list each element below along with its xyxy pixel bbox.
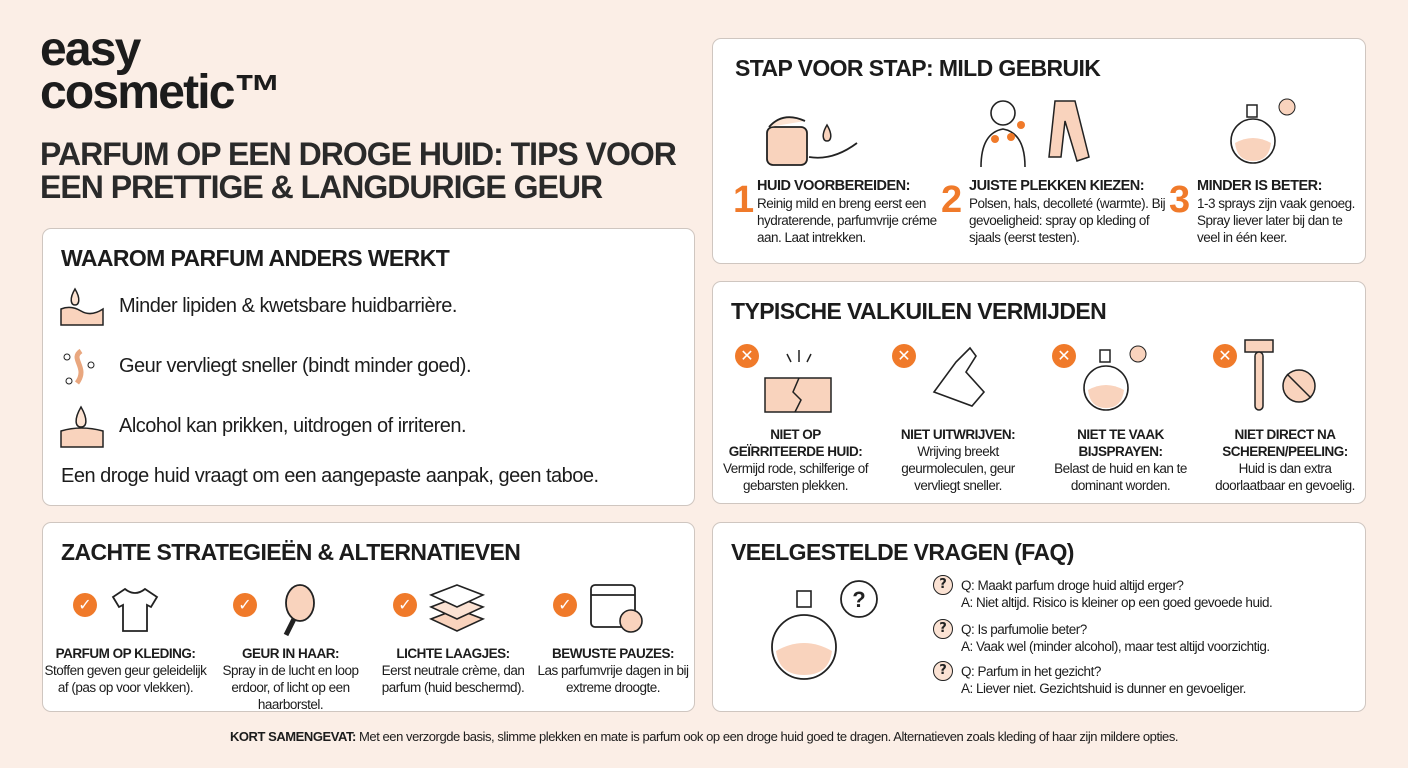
- panel: faq: [712, 522, 1366, 712]
- step 2: [941, 178, 1165, 245]
- step 3: [1169, 178, 1355, 245]
- item: kleding: PARFUM OP KLEDING:: [56, 646, 195, 661]
- step 3: 1-3 sprays zijn vaak genoeg. Spray liever later bij dan te veel in één keer.: [1197, 196, 1355, 245]
- item: uitwrijven: Wrijving breekt geurmoleculen, geur vervliegt sneller.: [901, 444, 1015, 493]
- logo: easy: [40, 23, 140, 76]
- item: bijsprayen: ✕: [1057, 346, 1071, 365]
- title: EEN PRETTIGE & LANGDURIGE GEUR: [40, 169, 602, 205]
- panel: valkuilen: [712, 281, 1366, 504]
- footer summary: KORT SAMENGEVAT: Met een verzorgde basis, slimme plekken en mate is parfum ook op een droge huid goed te dragen. Alternatieven zoals kleding of haar zijn mildere opties.: [230, 729, 1178, 744]
- item: pauzes: [537, 584, 689, 695]
- item: haar: Spray in de lucht en loop erdoor, of licht op een haarborstel.: [222, 663, 359, 712]
- panel: waarom: [42, 228, 695, 506]
- item: uitwrijven: NIET UITWRIJVEN:: [901, 427, 1015, 442]
- faq 3: Q: Parfum in het gezicht?: [961, 664, 1101, 679]
- item: pauzes: BEWUSTE PAUZES:: [552, 646, 674, 661]
- item: geirriteerde huid: ✕: [740, 346, 754, 365]
- icon: perfume question: [771, 580, 878, 680]
- faq 2: Q: Is parfumolie beter?: [961, 622, 1087, 637]
- item: bijsprayen: Belast de huid en kan te dominant worden.: [1054, 461, 1187, 493]
- item: scheren: NIET DIRECT NA: [1234, 427, 1336, 442]
- heading: valkuilen: TYPISCHE VALKUILEN VERMIJDEN: [731, 298, 1106, 324]
- step 1: [733, 178, 937, 245]
- faq 2: A: Vaak wel (minder alcohol), maar test altijd voorzichtig.: [961, 639, 1270, 654]
- heading: faq: VEELGESTELDE VRAGEN (FAQ): [731, 539, 1074, 565]
- title: PARFUM OP EEN DROGE HUID: TIPS VOOR: [40, 136, 676, 172]
- item: laagjes: [382, 584, 524, 695]
- item: bijsprayen: [1052, 344, 1187, 493]
- text: conclusion: Een droge huid vraagt om een aangepaste aanpak, geen taboe.: [61, 465, 599, 487]
- panel: zachte strategieen: [42, 522, 695, 712]
- item: scheren: SCHEREN/PEELING:: [1222, 444, 1348, 459]
- heading: strategieen: ZACHTE STRATEGIEËN & ALTERNATIEVEN: [61, 539, 520, 565]
- faq 1: ?: [939, 577, 947, 592]
- heading: waarom: WAAROM PARFUM ANDERS WERKT: [61, 245, 449, 271]
- item: geur: Geur vervliegt sneller (bindt minder goed).: [119, 355, 471, 377]
- item: bijsprayen: BIJSPRAYEN:: [1078, 444, 1163, 459]
- item: uitwrijven: ✕: [897, 346, 911, 365]
- heading: stap: STAP VOOR STAP: MILD GEBRUIK: [735, 55, 1100, 81]
- item: scheren: Huid is dan extra doorlaatbaar en gevoelig.: [1215, 461, 1355, 493]
- item: kleding: Stoffen geven geur geleidelijk af (pas op voor vlekken).: [45, 663, 206, 695]
- item: alcohol: [60, 406, 466, 448]
- faq 3: [933, 661, 1246, 696]
- faq 1: [933, 575, 1272, 610]
- step 1: Reinig mild en breng eerst een hydraterende, parfumvrije créme aan. Laat intrekken.: [757, 196, 937, 245]
- step 3: 3: [1169, 179, 1190, 221]
- faq 3: ?: [939, 663, 947, 678]
- icon: creme: [766, 116, 858, 166]
- step 2: Polsen, hals, decolleté (warmte). Bij gevoeligheid: spray op kleding of sjaals (eerst testen).: [969, 196, 1165, 245]
- item: uitwrijven: [892, 344, 1016, 493]
- step 2: JUISTE PLEKKEN KIEZEN:: [969, 178, 1144, 194]
- step 1: HUID VOORBEREIDEN:: [757, 178, 910, 194]
- item: geirriteerde huid: Vermijd rode, schilferige of gebarsten plekken.: [723, 461, 868, 493]
- item: geur: [64, 349, 471, 384]
- faq 2: ?: [939, 621, 947, 636]
- step 2: 2: [941, 179, 962, 221]
- faq 2: [933, 619, 1270, 654]
- icon: body & scarf: [980, 100, 1090, 167]
- logo: [40, 23, 280, 119]
- item: haar: [222, 584, 359, 712]
- item: lipiden: Minder lipiden & kwetsbare huidbarrière.: [119, 295, 457, 317]
- item: geirriteerde huid: NIET OP: [770, 427, 821, 442]
- item: laagjes: ✓: [398, 595, 412, 614]
- item: bijsprayen: NIET TE VAAK: [1077, 427, 1164, 442]
- item: geirriteerde huid: GEÏRRITEERDE HUID:: [729, 444, 862, 459]
- logo: cosmetic™: [40, 66, 280, 119]
- item: pauzes: ✓: [558, 595, 572, 614]
- item: kleding: [45, 588, 207, 695]
- step 3: MINDER IS BETER:: [1197, 178, 1322, 194]
- icon: perfume question: ?: [852, 587, 866, 612]
- item: geirriteerde huid: [723, 344, 869, 493]
- faq 1: Q: Maakt parfum droge huid altijd erger?: [961, 578, 1183, 593]
- item: haar: ✓: [238, 595, 252, 614]
- item: pauzes: Las parfumvrije dagen in bij extreme droogte.: [537, 663, 689, 695]
- item: scheren: ✕: [1218, 346, 1232, 365]
- item: lipiden: [60, 288, 457, 326]
- item: laagjes: LICHTE LAAGJES:: [396, 646, 510, 661]
- item: haar: GEUR IN HAAR:: [242, 646, 339, 661]
- item: kleding: ✓: [78, 595, 92, 614]
- item: alcohol: Alcohol kan prikken, uitdrogen of irriteren.: [119, 415, 466, 437]
- title: [40, 136, 676, 205]
- item: scheren: [1213, 339, 1355, 493]
- step 1: 1: [733, 179, 754, 221]
- item: laagjes: Eerst neutrale crème, dan parfum (huid beschermd).: [382, 663, 524, 695]
- icon: spray bottle: [1230, 98, 1296, 164]
- faq 1: A: Niet altijd. Risico is kleiner op een goed gevoede huid.: [961, 595, 1272, 610]
- panel: stap voor stap: [712, 38, 1366, 264]
- faq 3: A: Liever niet. Gezichtshuid is dunner en gevoeliger.: [961, 681, 1246, 696]
